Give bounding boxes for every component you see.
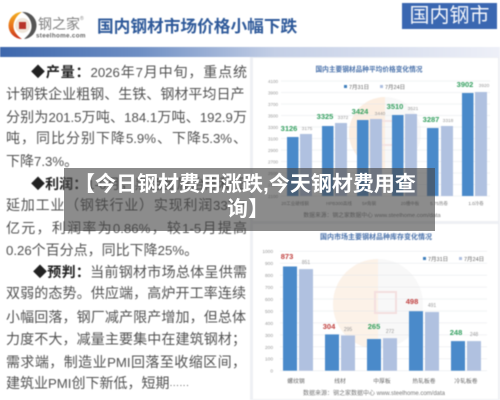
chart 2 axis and grid: 700 bbox=[265, 285, 273, 291]
chart 1 axis and grid: 2900 bbox=[268, 148, 278, 153]
chart 1 values: 3920 bbox=[479, 83, 490, 89]
chart 1 values: 3902 bbox=[457, 80, 473, 89]
chart 1 axis and grid: 3500 bbox=[268, 114, 278, 118]
logo: steelhome: steelhome.com bbox=[36, 32, 86, 40]
chart 2 values: 491 bbox=[428, 303, 436, 309]
chart 2 categories: 线材 bbox=[334, 377, 346, 385]
logo: steelhome bbox=[8, 11, 86, 40]
chart 1 categories: 5#角钢 bbox=[362, 200, 376, 207]
chart 2 categories bbox=[287, 377, 478, 385]
chart 2 legend bbox=[423, 256, 484, 263]
text block: profit: 延加工业（钢铁行业）实现利润337.7 bbox=[6, 197, 246, 213]
chart 2 axis and grid: 0 bbox=[270, 368, 273, 374]
chart 2 legend: 7月24日 bbox=[464, 256, 484, 263]
chart 2 axis and grid: 300 bbox=[265, 333, 273, 339]
chart 2 values: 265 bbox=[368, 322, 380, 331]
chart 2 legend: 7月31日 bbox=[428, 256, 448, 263]
chart 1 axis and grid: 2500 bbox=[268, 171, 278, 176]
text block: output: 计钢铁企业粗钢、生铁、钢材平均日产 bbox=[6, 86, 244, 102]
logo: steelhome: ® bbox=[80, 15, 84, 22]
logo: steelhome: 钢之家 bbox=[38, 16, 80, 32]
chart 1 categories: 5.75热卷 bbox=[430, 200, 448, 207]
chart 2 categories: 螺纹钢 bbox=[287, 377, 305, 385]
text block: output: 吨，同比分别下降5.9%、下降5.3%、 bbox=[6, 130, 247, 146]
chart 2 bars bbox=[283, 266, 481, 371]
chart 1 categories: 1.0冷卷 bbox=[468, 200, 484, 207]
chart 1 values: 3175 bbox=[302, 126, 313, 132]
overlay headline bbox=[64, 168, 435, 231]
header band bbox=[0, 47, 500, 57]
chart 2 axis and grid: 900 bbox=[265, 261, 273, 267]
chart 2 axis and grid: 200 bbox=[265, 345, 273, 351]
chart 2 axis and grid: 1000 bbox=[262, 249, 273, 255]
chart 2 values: 295 bbox=[344, 327, 352, 333]
text block: forecast: 小幅回落，钢厂减产限产增加，但总体 bbox=[6, 309, 246, 325]
text block: forecast: 双弱的态势。供应端，高炉开工率连续 bbox=[6, 285, 246, 301]
chart 1 values: 3510 bbox=[387, 102, 403, 111]
chart 2 axis and grid bbox=[262, 249, 487, 374]
chart 1 values bbox=[281, 80, 490, 133]
chart 1 legend: 7月31日 bbox=[349, 84, 369, 91]
chart 2 categories: 中厚板 bbox=[373, 377, 391, 385]
chart 2 watermark bbox=[333, 259, 423, 349]
section tag: 国内钢市 bbox=[410, 5, 490, 27]
chart 2 values bbox=[281, 252, 478, 338]
chart 1 axis and grid: 3100 bbox=[268, 136, 278, 142]
chart 1 axis and grid: 2100 bbox=[268, 194, 278, 199]
text block: forecast bbox=[6, 264, 247, 391]
text block: forecast: 力度不大，减量主要集中在建筑钢材； bbox=[6, 331, 246, 347]
chart 2 categories: 热轧板卷 bbox=[412, 377, 436, 385]
chart 2 values: 873 bbox=[281, 252, 293, 261]
overlay headline: 询】 bbox=[227, 198, 269, 221]
text block: profit: 亿元，利润率为0.86%，较1-5月提高 bbox=[6, 220, 247, 236]
chart 2 values: 304 bbox=[323, 322, 336, 331]
chart 2 values: 248 bbox=[470, 332, 478, 338]
chart 1 values: 3521 bbox=[408, 106, 419, 112]
chart 1 axis and grid: 3700 bbox=[268, 102, 278, 107]
chart 1 bars bbox=[287, 92, 487, 196]
text block: output: 分别为201.5万吨、184.1万吨、192.9万 bbox=[6, 109, 247, 125]
chart 1 legend bbox=[344, 84, 405, 91]
text block: forecast: 需求端，制造业PMI回落至收缩区间， bbox=[6, 354, 246, 370]
chart 1 legend: 7月24日 bbox=[385, 84, 405, 91]
text block: profit: 0.26个百分点，同比下降25%。 bbox=[6, 242, 198, 258]
chart 1 axis and grid: 3900 bbox=[268, 90, 278, 96]
chart 1 title: 国内主要钢材品种平均价格变化情况 bbox=[316, 64, 423, 74]
chart 1 values: 3424 bbox=[352, 107, 369, 116]
chart 2 axis and grid: 100 bbox=[265, 356, 273, 362]
text block: forecast: 建筑业PMI创下新低，短期······ bbox=[6, 375, 189, 391]
chart 1 watermark bbox=[349, 97, 421, 169]
overlay headline: 【今日钢材费用涨跌,今天钢材费用查 bbox=[74, 173, 416, 196]
chart 1 axis and grid: 2300 bbox=[268, 182, 278, 188]
chart 1 axis and grid bbox=[268, 79, 490, 199]
chart 1 values: 3440 bbox=[375, 111, 386, 117]
chart 1 values: 3372 bbox=[338, 115, 349, 121]
title: 国内钢材市场价格小幅下跌 bbox=[97, 17, 297, 36]
chart 2 values: 851 bbox=[302, 260, 310, 266]
text block: output: ◆产量：2026年7月中旬，重点统 bbox=[31, 64, 247, 80]
chart 1 categories: HPB300高线 bbox=[326, 200, 352, 207]
chart 2 axis and grid: 400 bbox=[265, 321, 273, 327]
chart 1 source: 数据来源：钢之家数据中心 www.steelhome.com/data bbox=[303, 211, 441, 219]
chart 1 axis and grid: 3300 bbox=[268, 125, 278, 130]
chart 1 categories bbox=[281, 200, 484, 207]
chart 2 categories: 冷轧板卷 bbox=[454, 377, 478, 385]
chart 2 values: 272 bbox=[386, 329, 394, 335]
text block: output bbox=[6, 64, 248, 169]
chart 1 values: 3325 bbox=[317, 112, 333, 121]
text block: forecast: ◆预判：当前钢材市场总体呈供需 bbox=[33, 264, 247, 280]
chart panel: average prices bbox=[250, 57, 500, 400]
chart 1 values: 3126 bbox=[281, 124, 297, 133]
chart 1 categories: 20工业硬线钢 bbox=[281, 200, 309, 207]
chart 1 axis and grid: 2700 bbox=[268, 160, 278, 164]
chart 2 title: 国内市场主要钢材品种库存变化情况 bbox=[320, 232, 432, 241]
chart 2 source: 数据来源：钢之家数据中心 www.steelhome.com/data bbox=[303, 389, 446, 397]
chart 1 axis and grid: 4100 bbox=[268, 79, 278, 84]
chart 1 values: 3287 bbox=[423, 115, 439, 124]
chart 2 axis and grid: 500 bbox=[265, 309, 273, 315]
text block: profit bbox=[6, 176, 247, 258]
chart 2 axis and grid: 800 bbox=[265, 273, 273, 279]
text block: profit: ◆利润：1-6月，黑色金属冶炼和压 bbox=[31, 176, 247, 192]
chart 2 values: 248 bbox=[450, 328, 462, 337]
chart 1 categories: 20槽中板 bbox=[401, 200, 420, 207]
chart 1 values: 3318 bbox=[443, 118, 454, 124]
text block: output: 下降7.3%。 bbox=[6, 153, 78, 169]
chart 2 values: 498 bbox=[406, 297, 418, 306]
chart 2 axis and grid: 600 bbox=[265, 297, 273, 303]
